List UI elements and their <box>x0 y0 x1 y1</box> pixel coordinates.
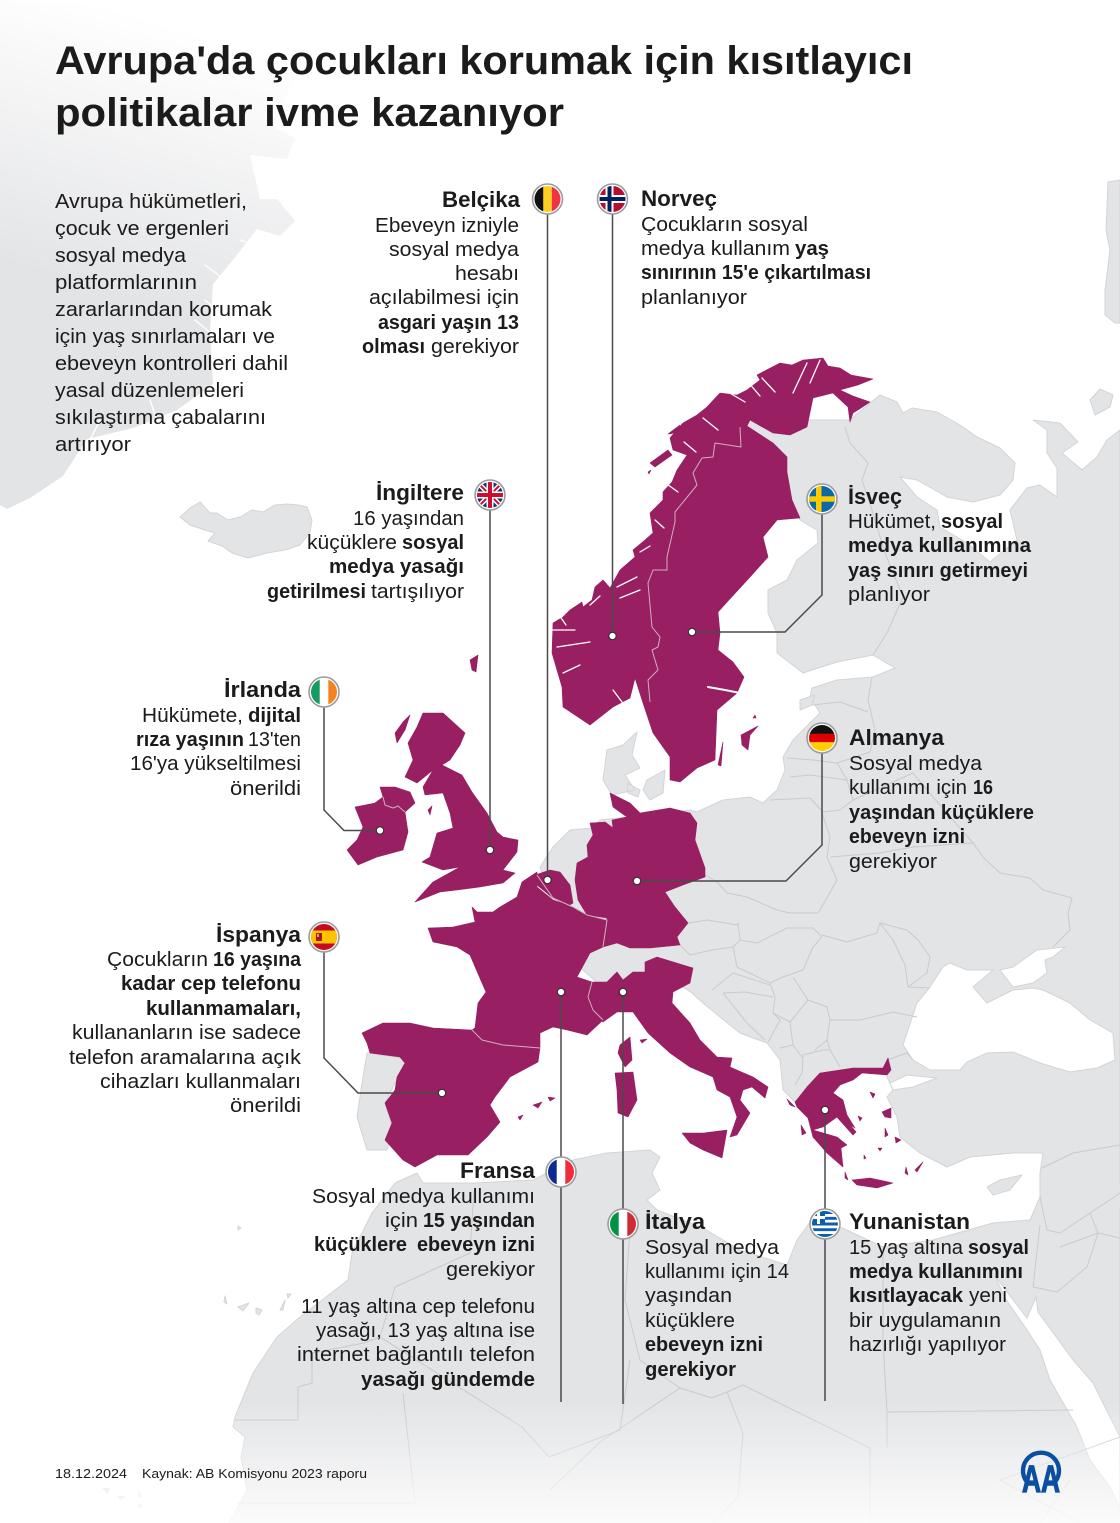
country heading: İtalya <box>645 1209 705 1234</box>
body text: tartışılıyor <box>371 581 464 603</box>
Northern Ireland border <box>383 797 405 812</box>
Sicily and Sardinia <box>615 1072 727 1158</box>
body text: planlanıyor <box>641 287 747 309</box>
body text: yaşından küçüklere <box>849 802 1034 824</box>
body text: gerekiyor <box>431 336 519 358</box>
body text: ebeveyn izni <box>645 1334 763 1356</box>
map dot <box>609 632 616 640</box>
body text: yasağı gündemde <box>361 1369 535 1391</box>
body text: küçüklere <box>314 1234 407 1256</box>
body text <box>362 215 520 358</box>
map dot <box>688 628 696 636</box>
body text: 16 yaşına <box>213 949 302 971</box>
intro text: Avrupa hükümetleri, <box>55 191 247 213</box>
map dot <box>633 877 641 885</box>
Shetland isle <box>470 655 478 672</box>
highlighted countries in purple <box>347 358 923 1188</box>
body text: açılabilmesi için <box>369 287 519 309</box>
joint patch between Asia and Africa <box>1042 1185 1120 1207</box>
intro text: sosyal medya <box>55 245 187 267</box>
body text: medya kullanımını <box>849 1261 1023 1283</box>
country heading: İrlanda <box>224 677 301 702</box>
body text: Sosyal medya kullanımı <box>312 1186 535 1208</box>
body text: için <box>385 1210 418 1232</box>
body text <box>848 511 1032 606</box>
Italy <box>588 957 768 1137</box>
connector line <box>324 707 380 830</box>
icon: Greece flag <box>810 1209 840 1239</box>
icon: AA logo <box>1022 1453 1060 1501</box>
panel: Norveç <box>598 184 871 640</box>
Sea of Azov <box>1000 947 1065 987</box>
map dot <box>619 988 627 996</box>
body text: Hükümete, <box>142 705 243 727</box>
body text: kullananların ise sadece <box>72 1022 301 1044</box>
intro text: zararlarından korumak <box>55 299 273 321</box>
intro text: çocuk ve ergenleri <box>55 218 229 240</box>
body text: 16 yaşından <box>353 508 464 530</box>
body text <box>130 705 301 800</box>
body text: kadar cep telefonu <box>121 973 301 995</box>
connector line <box>824 1110 826 1401</box>
title <box>55 39 913 135</box>
Africa and Arabia landmass <box>229 1150 1120 1523</box>
body text: sosyal <box>941 511 1003 533</box>
body text: Sosyal medya <box>849 753 983 775</box>
body text: 16 <box>973 777 993 799</box>
body text: küçüklere <box>307 532 397 554</box>
icon: Italy flag <box>608 1209 638 1239</box>
icon: France flag <box>546 1157 576 1187</box>
body text: Hükümet, <box>848 511 936 533</box>
connector line <box>637 753 822 881</box>
Eurasia landmass <box>540 395 1120 1200</box>
panel: İspanya <box>69 922 446 1117</box>
body text: Sosyal medya <box>645 1237 780 1259</box>
body text: getirilmesi <box>267 581 366 603</box>
Swedish lake <box>708 687 740 693</box>
country heading: Fransa <box>460 1158 535 1183</box>
Denmark <box>603 732 665 800</box>
panel: İsveç <box>688 484 1032 636</box>
body text: 11 yaş altına cep telefonu <box>301 1296 535 1318</box>
country heading: İspanya <box>216 922 301 947</box>
body text: bir uygulamanın <box>849 1310 1001 1332</box>
intro text: için yaş sınırlamaları ve <box>55 326 275 348</box>
map dot <box>544 876 551 884</box>
icon: Sweden flag <box>807 484 837 514</box>
body text: gerekiyor <box>446 1259 535 1281</box>
small islands <box>103 180 1120 1508</box>
body text: küçüklere <box>645 1310 735 1332</box>
icon: Belgium flag <box>532 184 562 214</box>
Germany <box>575 793 705 948</box>
body text: internet bağlantılı telefon <box>297 1344 535 1366</box>
country heading: İngiltere <box>376 480 464 505</box>
intro text: ebeveyn kontrolleri dahil <box>55 353 288 375</box>
country heading: Norveç <box>641 186 717 211</box>
body text: sosyal medya <box>389 239 520 261</box>
panel: Almanya <box>633 723 1034 885</box>
Sea of Marmara <box>890 1075 937 1090</box>
body text: 15 yaşından <box>423 1210 535 1232</box>
footer date and source: 18.12.2024 <box>55 1466 127 1481</box>
body text: kullanmamaları, <box>146 998 301 1020</box>
intro text: artırıyor <box>55 434 131 456</box>
body text: kullanımı için 14 <box>645 1261 789 1283</box>
body text <box>645 1237 789 1381</box>
body text <box>69 949 302 1117</box>
connector line <box>546 214 548 880</box>
Iceland <box>180 502 312 558</box>
icon: Ireland flag <box>309 677 339 707</box>
intro text <box>55 191 288 456</box>
title: Avrupa'da çocukları korumak için kısıtlayıcı <box>55 39 913 83</box>
body text: medya kullanımına <box>848 535 1032 557</box>
body text: 16'ya yükseltilmesi <box>130 753 301 775</box>
country borders <box>235 427 1120 1523</box>
panel: İngiltere <box>267 480 505 854</box>
body text: planlıyor <box>848 584 930 606</box>
Ireland <box>347 787 415 865</box>
body text: cihazları kullanmaları <box>100 1071 301 1093</box>
body text: Çocukların sosyal <box>641 214 808 236</box>
connector line <box>324 952 442 1093</box>
body text: medya kullanım <box>641 238 790 260</box>
map dot <box>438 1089 446 1097</box>
body text: asgari yaşın 13 <box>378 312 519 334</box>
body text: gerekiyor <box>849 851 937 873</box>
interior borders <box>472 875 607 1048</box>
footer date and source <box>55 1466 367 1481</box>
body text: sosyal <box>968 1237 1029 1259</box>
France <box>428 872 607 1048</box>
panel: Fransa <box>297 988 576 1402</box>
body text: olması <box>362 336 425 358</box>
connector line <box>489 510 491 850</box>
body text: yaşından <box>645 1285 732 1307</box>
Belgium <box>535 870 573 906</box>
body text: sınırının 15'e çıkartılması <box>641 262 871 284</box>
panel: İtalya <box>608 988 789 1404</box>
body text: kullanımı için <box>849 777 967 799</box>
connector line <box>612 214 614 636</box>
body text: ebeveyn izni <box>417 1234 535 1256</box>
body text: önerildi <box>230 1095 301 1117</box>
country heading: Almanya <box>849 725 944 750</box>
body text: sosyal <box>402 532 464 554</box>
bottom fade to white <box>0 1400 1120 1523</box>
Spain <box>362 1023 540 1167</box>
body text: gerekiyor <box>645 1359 736 1381</box>
panel: Belçika <box>362 184 562 884</box>
icon: Norway flag <box>598 184 628 214</box>
body text: 13'ten <box>248 729 301 751</box>
body text <box>267 508 464 603</box>
title: politikalar ivme kazanıyor <box>55 91 564 135</box>
body text <box>297 1186 535 1391</box>
body text: Çocukların <box>107 949 208 971</box>
body text: Ebeveyn izniyle <box>375 215 519 237</box>
body text: dijital <box>248 705 301 727</box>
Red Sea <box>995 1276 1120 1507</box>
intro text: sıkılaştırma çabalarını <box>55 407 266 429</box>
body text: telefon aramalarına açık <box>69 1047 302 1069</box>
body text: ebeveyn izni <box>849 826 965 848</box>
body text: önerildi <box>230 778 301 800</box>
connector line <box>560 992 562 1402</box>
intro text: yasal düzenlemeleri <box>55 380 244 402</box>
Portugal <box>357 1053 403 1150</box>
Norway and Sweden <box>552 358 873 782</box>
seas cut out of the land <box>890 947 1120 1507</box>
body text: yasağı, 13 yaş altına ise <box>316 1320 535 1342</box>
icon: AA logo: AA <box>1022 1459 1060 1501</box>
map dot <box>486 846 494 854</box>
intro text: platformlarının <box>55 272 197 294</box>
body text <box>849 1237 1029 1356</box>
connector line <box>692 514 822 632</box>
connector line <box>622 992 624 1404</box>
body text: 15 yaş altına <box>849 1237 964 1259</box>
icon: UK flag <box>475 480 505 510</box>
map dot <box>376 827 384 834</box>
map dot <box>821 1106 829 1114</box>
body text: rıza yaşının <box>136 729 244 751</box>
body text <box>849 753 1034 873</box>
body text: yaş <box>795 238 829 260</box>
Norway-Sweden border <box>648 427 741 702</box>
body text: hazırlığı yapılıyor <box>849 1334 1006 1356</box>
footer date and source: Kaynak: AB Komisyonu 2023 raporu <box>142 1466 367 1481</box>
country heading: İsveç <box>848 484 902 509</box>
icon: Germany flag <box>807 723 837 753</box>
United Kingdom <box>395 713 518 902</box>
body text <box>641 214 871 309</box>
Black Sea <box>903 963 1115 1072</box>
Greenland <box>0 0 320 509</box>
body text: medya yasağı <box>329 556 464 578</box>
panel: İrlanda <box>130 677 384 834</box>
Greece <box>795 1058 891 1167</box>
map dot <box>557 988 565 996</box>
body text: hesabı <box>455 263 519 285</box>
body text: yeni <box>969 1285 1007 1307</box>
Corsica, Balearics and Elba <box>518 1037 647 1120</box>
country heading: Belçika <box>442 187 520 212</box>
body text: yaş sınırı getirmeyi <box>848 560 1028 582</box>
panel: Yunanistan <box>810 1106 1029 1401</box>
icon: Spain flag <box>309 922 339 952</box>
country heading: Yunanistan <box>849 1209 970 1234</box>
body text: kısıtlayacak <box>849 1285 964 1307</box>
Greek islands <box>787 1092 923 1188</box>
